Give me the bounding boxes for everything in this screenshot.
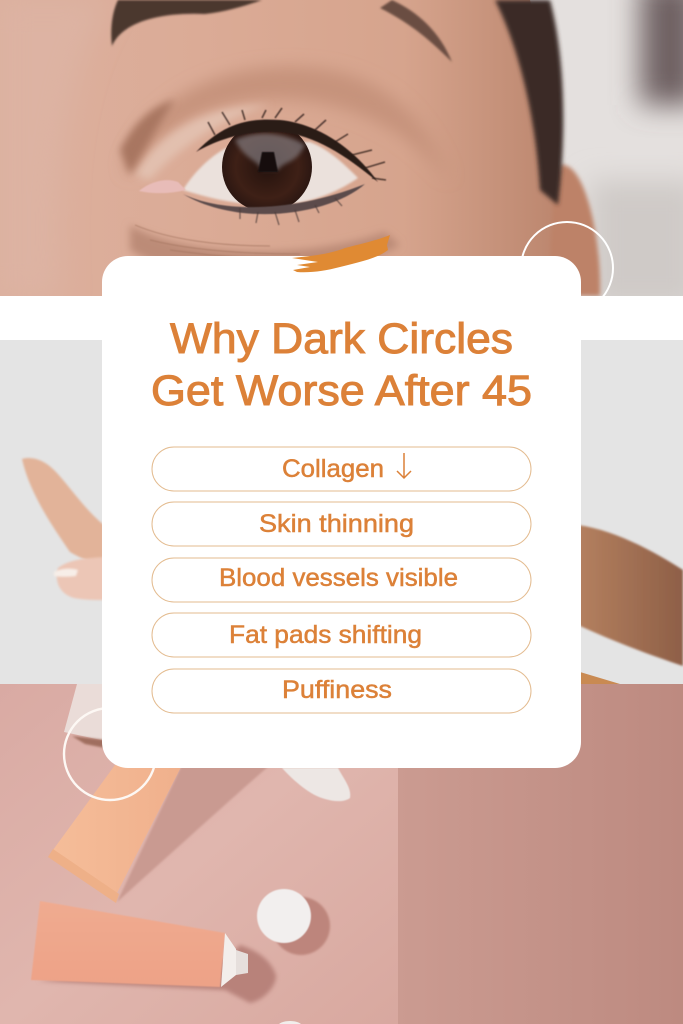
list item: Skin thinning: Skin thinning <box>259 510 414 538</box>
tube shadow <box>117 765 270 902</box>
list item: Fat pads shifting: Fat pads shifting <box>229 621 422 649</box>
icon: forearm <box>578 525 683 666</box>
list item: Blood vessels visible: Blood vessels visible <box>219 564 458 592</box>
icon: finger <box>22 458 104 600</box>
list item: Skin thinning <box>152 502 531 546</box>
hair <box>495 0 563 205</box>
shaded eye socket <box>142 64 427 158</box>
icon: down arrow <box>397 453 411 478</box>
lower lash line <box>183 184 365 214</box>
panel: white card <box>102 256 581 768</box>
panel: eye close-up photo <box>0 0 683 310</box>
panel: white band <box>0 296 683 340</box>
list item: Collagen <box>152 447 531 491</box>
icon: lying tube <box>31 901 276 1003</box>
panel: hand photo <box>0 340 683 684</box>
title: Get Worse After 45 <box>151 367 532 415</box>
list item: Blood vessels visible <box>152 558 531 602</box>
eye white <box>183 142 358 205</box>
list item: Puffiness <box>152 669 531 713</box>
icon: cream dab <box>282 768 350 801</box>
list item: Collagen: Collagen <box>282 455 384 483</box>
tear duct <box>139 180 186 193</box>
upper lash line <box>196 120 378 182</box>
list item: Fat pads shifting <box>152 613 531 657</box>
panel: pink cosmetics photo <box>0 684 683 1024</box>
title <box>151 315 532 415</box>
eyebrow <box>111 0 452 62</box>
list item: Puffiness: Puffiness <box>282 676 392 704</box>
icon: ear <box>548 165 600 296</box>
icon: thin white circle top right <box>521 222 613 314</box>
icon: white box behind card <box>64 684 103 749</box>
icon: round cap <box>257 889 330 955</box>
icon: partial white cap bottom edge <box>278 1021 302 1024</box>
title: Why Dark Circles <box>170 315 513 363</box>
icon: thin white circle bottom left <box>64 708 156 800</box>
icon: orange brush stroke <box>292 235 390 272</box>
icon: eye <box>139 108 386 225</box>
icon: upright tube <box>48 765 182 903</box>
under-eye wrinkles <box>128 226 398 256</box>
